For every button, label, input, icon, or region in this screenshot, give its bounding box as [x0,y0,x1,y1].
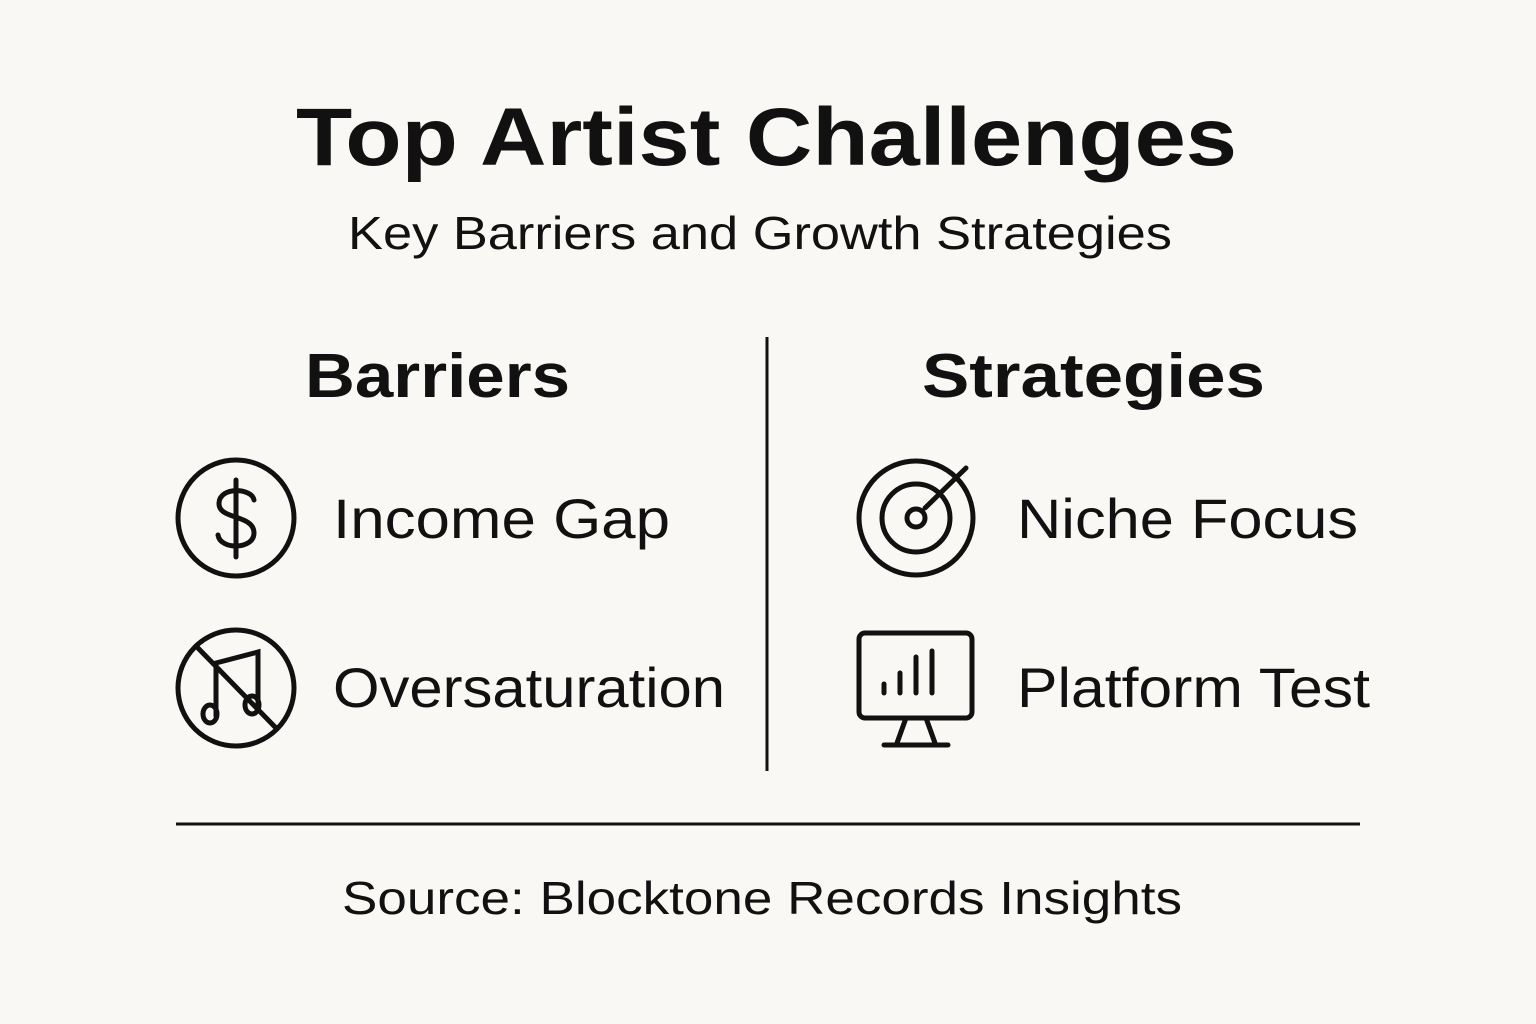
icon: monitor chart [859,633,972,745]
icon: dollar [178,460,294,576]
icon: target [859,461,973,575]
text: income gap: Income Gap [333,487,670,550]
source: Source: Blocktone Records Insights [342,872,1182,924]
heading: barriers: Barriers [305,342,570,411]
icon: no music [178,630,294,746]
text: platform test: Platform Test [1017,656,1370,719]
heading: strategies: Strategies [922,342,1265,411]
text: oversaturation: Oversaturation [333,656,725,719]
subtitle: Key Barriers and Growth Strategies [348,207,1172,259]
title: Top Artist Challenges [296,92,1237,183]
text: niche focus: Niche Focus [1017,487,1358,550]
